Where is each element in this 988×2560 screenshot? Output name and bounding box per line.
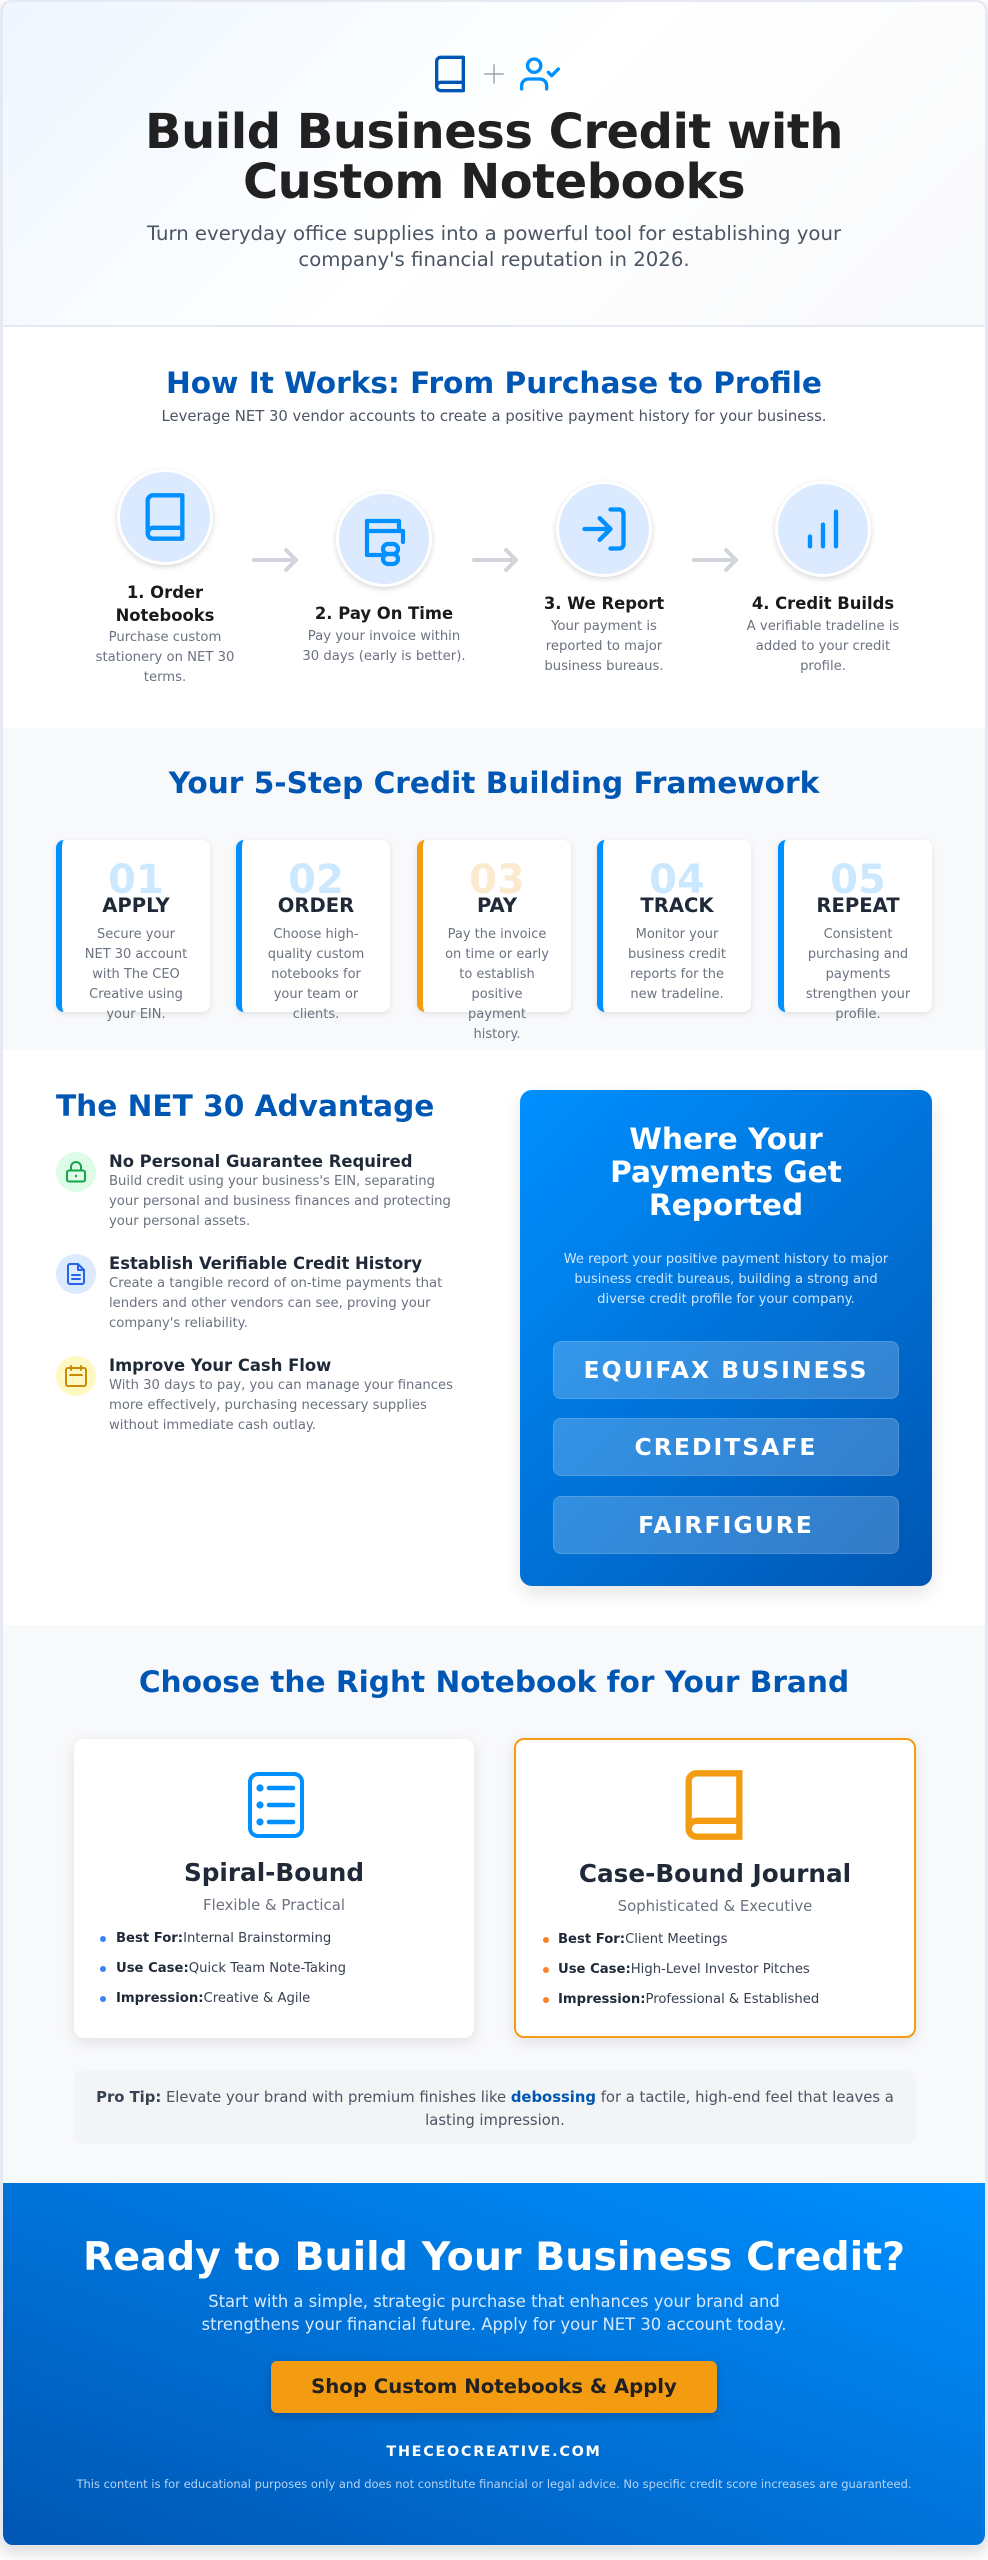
card text: purchasing and — [808, 947, 908, 962]
main title: Build Business Credit with — [145, 104, 843, 160]
panel heading: Reported — [649, 1188, 803, 1222]
card text: profile. — [835, 1007, 881, 1022]
benefit text: more effectively, purchasing necessary supplies — [109, 1398, 427, 1413]
card text: Choose high- — [273, 927, 359, 942]
card text: reports for the — [630, 967, 724, 982]
subtitle: Turn everyday office supplies into a powerful tool for establishing your — [147, 222, 841, 245]
CTA text: strengthens your financial future. Apply for your NET 30 account today. — [202, 2315, 786, 2334]
step description — [746, 619, 899, 674]
panel text — [564, 1252, 888, 1307]
arrow 2 — [472, 548, 518, 572]
section intro: Leverage NET 30 vendor accounts to create a positive payment history for your business. — [162, 408, 826, 425]
step title: 1. Order — [127, 583, 203, 602]
card text: history. — [474, 1027, 520, 1042]
bureau: Creditsafe: CREDITSAFE — [635, 1433, 817, 1461]
panel: 5-step framework — [3, 728, 985, 1050]
arrow 1 — [252, 548, 298, 572]
framework card 05 — [778, 840, 932, 1012]
card text: Consistent — [824, 927, 892, 942]
step description: added to your credit — [756, 639, 890, 654]
pro tip callout: Pro Tip: Elevate your brand with premium finishes like debossing for a tactile, high-end feel that leaves a — [96, 2089, 894, 2106]
CTA button — [271, 2361, 717, 2413]
bullet — [100, 1936, 106, 1942]
card title: ORDER — [278, 894, 354, 917]
subtitle: company's financial reputation in 2026. — [298, 248, 690, 271]
card subtitle: Flexible & Practical — [203, 1896, 345, 1914]
card text: new tradeline. — [630, 987, 724, 1002]
panel: call to action — [3, 2183, 985, 2546]
header panel — [3, 2, 985, 327]
bureau: Equifax — [553, 1341, 899, 1399]
section heading: How It Works: From Purchase to Profile — [166, 366, 822, 400]
benefit 2 — [56, 1254, 442, 1331]
main title: Custom Notebooks — [243, 154, 745, 210]
bureau: FairFigure: FAIRFIGURE — [638, 1511, 814, 1539]
card text: quality custom — [268, 947, 364, 962]
card text — [445, 927, 549, 1042]
icon: lock — [56, 1152, 96, 1192]
benefit text — [109, 1378, 453, 1433]
step description: Purchase custom — [109, 630, 221, 645]
step description — [544, 619, 664, 674]
card title: TRACK — [640, 894, 714, 917]
icon: report arrow — [556, 481, 652, 577]
benefit text: company's reliability. — [109, 1316, 248, 1331]
bullet — [543, 1937, 549, 1943]
step description: profile. — [800, 659, 846, 674]
header icons: book plus verified user — [435, 56, 560, 92]
step description: 30 days (early is better). — [302, 649, 466, 664]
card title: PAY — [477, 894, 517, 917]
step title — [116, 583, 214, 625]
pro tip callout — [74, 2071, 916, 2144]
arrow 3 — [692, 548, 738, 572]
number: 02 — [288, 857, 344, 903]
step 3 — [544, 482, 664, 674]
step title: 4. Credit Builds — [752, 594, 894, 613]
bullet — [100, 1966, 106, 1972]
benefit text — [109, 1174, 451, 1229]
panel heading: Where Your — [629, 1122, 823, 1156]
card text: Creative using — [89, 987, 183, 1002]
card text: Pay the invoice — [448, 927, 546, 942]
bureau: FairFigure — [553, 1496, 899, 1554]
benefit text: Build credit using your business's EIN, separating — [109, 1174, 435, 1189]
bullet — [543, 1967, 549, 1973]
card text: notebooks for — [271, 967, 361, 982]
card text: NET 30 account — [85, 947, 187, 962]
benefit text: your personal and business finances and protecting — [109, 1194, 451, 1209]
feature: best for: Best For:Client Meetings — [558, 1932, 727, 1947]
icon: calendar — [56, 1356, 96, 1396]
card text: your team or — [274, 987, 358, 1002]
card text: with The CEO — [92, 967, 180, 982]
card text: payment — [468, 1007, 526, 1022]
card text — [268, 927, 364, 1022]
icon: bar chart — [775, 481, 871, 577]
step description: terms. — [144, 670, 186, 685]
icon: case-bound book — [686, 1770, 742, 1840]
panel: choose the right notebook — [3, 1625, 985, 2183]
CTA text — [202, 2292, 786, 2334]
disclaimer: This content is for educational purposes only and does not constitute financial or legal advice. No specific credit score increases are guaranteed. — [76, 2477, 912, 2491]
CTA heading: Ready to Build Your Business Credit? — [83, 2234, 905, 2280]
panel heading: Payments Get — [610, 1155, 842, 1189]
number: 03 — [469, 857, 525, 903]
benefit title: Establish Verifiable Credit History — [109, 1254, 422, 1273]
benefit text: without immediate cash outlay. — [109, 1418, 316, 1433]
icon: book — [117, 469, 213, 565]
icon: spiral notebook — [248, 1772, 304, 1838]
feature: best for: Best For:Internal Brainstorming — [116, 1931, 331, 1946]
number: 04 — [649, 857, 705, 903]
card text: business credit — [628, 947, 726, 962]
bullet — [100, 1996, 106, 2002]
main title — [145, 104, 843, 210]
step description: Your payment is — [551, 619, 657, 634]
card title: Spiral-Bound — [184, 1858, 364, 1887]
card text: strengthen your — [806, 987, 910, 1002]
step 4 — [746, 482, 899, 674]
step title: 2. Pay On Time — [315, 604, 453, 623]
step description: business bureaus. — [544, 659, 664, 674]
step description: Pay your invoice within — [308, 629, 460, 644]
card text: to establish — [459, 967, 535, 982]
panel text: business credit bureaus, building a strong and — [574, 1272, 878, 1287]
card text: Monitor your — [636, 927, 718, 942]
panel heading — [610, 1122, 842, 1222]
framework card 02 — [236, 840, 390, 1012]
card text — [806, 927, 910, 1022]
number: 05 — [830, 857, 886, 903]
benefit 1 — [56, 1152, 451, 1229]
panel: where your payments get reported — [520, 1090, 932, 1586]
step 2 — [302, 492, 466, 664]
card text — [628, 927, 726, 1002]
benefit title: No Personal Guarantee Required — [109, 1152, 412, 1171]
feature: use case: Use Case:Quick Team Note-Taking — [116, 1961, 346, 1976]
subtitle — [146, 222, 842, 271]
benefit text: your personal assets. — [109, 1214, 250, 1229]
step title: 3. We Report — [544, 594, 664, 613]
card title: APPLY — [102, 894, 170, 917]
number: 01 — [108, 857, 164, 903]
step title: Notebooks — [116, 606, 214, 625]
panel text: We report your positive payment history to major — [564, 1252, 888, 1267]
panel: how it works — [3, 327, 985, 730]
step description: stationery on NET 30 — [96, 650, 234, 665]
icon: invoice payment — [336, 491, 432, 587]
card: case-bound journal — [514, 1738, 916, 2038]
bureau: Creditsafe — [553, 1418, 899, 1476]
feature: impression: Impression:Creative & Agile — [116, 1991, 310, 2006]
card text: on time or early — [445, 947, 549, 962]
section heading: Choose the Right Notebook for Your Brand — [139, 1665, 849, 1699]
step 1 — [96, 470, 234, 685]
card title: Case-Bound Journal — [579, 1859, 851, 1888]
card subtitle: Sophisticated & Executive — [618, 1897, 812, 1915]
feature: use case: Use Case:High-Level Investor Pitches — [558, 1962, 810, 1977]
framework card 01 — [56, 840, 210, 1012]
feature: impression: Impression:Professional & Established — [558, 1992, 819, 2007]
bullet — [543, 1997, 549, 2003]
CTA button: Shop Custom Notebooks & Apply — [311, 2375, 677, 2398]
card text — [85, 927, 187, 1022]
card text: clients. — [293, 1007, 339, 1022]
step description: A verifiable tradeline is — [747, 619, 899, 634]
benefit title: Improve Your Cash Flow — [109, 1356, 331, 1375]
pro tip callout: lasting impression. — [425, 2112, 565, 2129]
card text: Secure your — [97, 927, 175, 942]
benefit 3 — [56, 1356, 453, 1433]
bureau: Equifax: EQUIFAX BUSINESS — [584, 1356, 868, 1384]
benefit text — [109, 1276, 442, 1331]
framework card 03 — [417, 840, 571, 1012]
benefit text: With 30 days to pay, you can manage your finances — [109, 1378, 453, 1393]
benefit text: Create a tangible record of on-time payments that — [109, 1276, 442, 1291]
section heading: The NET 30 Advantage — [56, 1089, 434, 1123]
icon: document — [56, 1254, 96, 1294]
section heading: Your 5-Step Credit Building Framework — [169, 766, 819, 800]
framework card 04 — [597, 840, 751, 1012]
card: spiral-bound — [74, 1739, 474, 2038]
card text: your EIN. — [106, 1007, 166, 1022]
step description: reported to major — [546, 639, 662, 654]
card text: payments — [826, 967, 890, 982]
benefit text: lenders and other vendors can see, proving your — [109, 1296, 431, 1311]
card text: positive — [472, 987, 522, 1002]
feature list — [543, 1932, 819, 2007]
step description — [302, 629, 466, 664]
CTA text: Start with a simple, strategic purchase that enhances your brand and — [208, 2292, 780, 2311]
step description — [96, 630, 234, 685]
website: THECEOCREATIVE.COM — [386, 2444, 602, 2460]
feature list — [100, 1931, 346, 2006]
panel text: diverse credit profile for your company. — [597, 1292, 855, 1307]
card title: REPEAT — [816, 894, 900, 917]
